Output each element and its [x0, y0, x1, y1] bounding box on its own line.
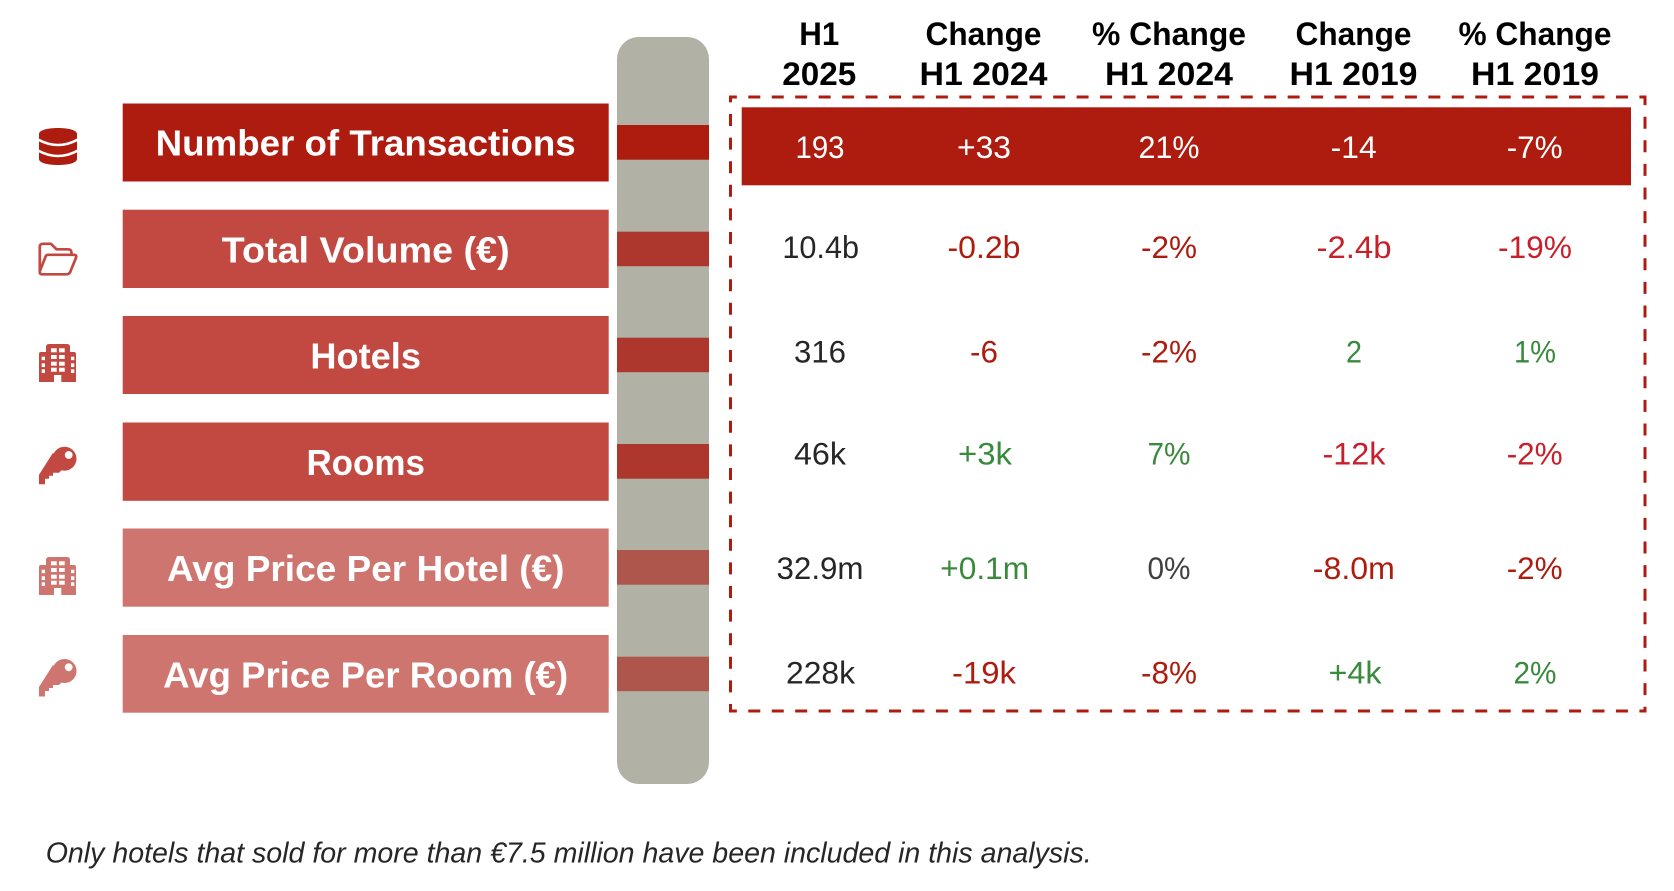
label: Avg Price Per Hotel: Avg Price Per Hotel (€): [167, 548, 564, 589]
icon: key light: [39, 659, 76, 696]
column headings: 2025: [782, 56, 856, 92]
icon: database: [38, 128, 78, 165]
row: Total Volume: 10.4b: [782, 229, 859, 265]
row: Rooms: -12k: [1322, 436, 1386, 472]
row: Avg Price Per Room: -8%: [1141, 655, 1197, 691]
column headings: H1 2019: [1290, 56, 1418, 92]
dashed table frame: [729, 96, 1646, 712]
column headings: H1: [799, 16, 839, 52]
row: Avg Price Per Room: +4k: [1328, 655, 1382, 691]
column headings: H1 2024: [920, 56, 1048, 92]
row: Avg Price Per Room: -19k: [952, 655, 1016, 691]
label: Avg Price Per Room: Avg Price Per Room (€): [163, 655, 568, 696]
label: Avg Price Per Room: [123, 635, 609, 713]
icon: key: [39, 447, 76, 484]
row: Avg Price Per Room: 2%: [1514, 655, 1556, 691]
label: Number of Transactions: [123, 104, 609, 182]
column headings: % Change: [1458, 16, 1612, 52]
row: Hotels: 316: [794, 333, 846, 369]
row: Total Volume: -0.2b: [948, 229, 1020, 265]
icon: open folder: [40, 244, 76, 274]
row: Avg Price Per Room: [786, 655, 1556, 691]
highlighted row: Number of Transactions: +33: [957, 129, 1011, 165]
column headings: % Change: [1092, 16, 1246, 52]
row: Rooms: 46k: [794, 436, 846, 472]
row: Hotels: -2%: [1141, 333, 1197, 369]
row: Rooms: -2%: [1507, 436, 1563, 472]
label: Rooms: [123, 422, 609, 501]
icon: hotel building: [39, 344, 76, 382]
label: Total Volume: [123, 210, 609, 288]
row: Hotels: 1%: [1514, 333, 1556, 369]
label: Avg Price Per Hotel: [123, 528, 609, 607]
highlighted row: Number of Transactions: [742, 107, 1631, 185]
label: Hotels: Hotels: [310, 335, 421, 376]
row: Avg Price Per Hotel: -8.0m: [1313, 550, 1395, 586]
row: Avg Price Per Hotel: +0.1m: [940, 550, 1029, 586]
panel: connector column: [617, 37, 709, 784]
row: Rooms: [794, 436, 1563, 472]
row: Avg Price Per Room: 228k: [786, 655, 855, 691]
column headings: H1 2019: [1471, 56, 1599, 92]
row: Hotels: [794, 333, 1556, 369]
label: Rooms: Rooms: [306, 442, 425, 483]
row: Total Volume: [782, 229, 1572, 265]
footnote: Only hotels that sold for more than €7.5 million have been included in this analysis.: [46, 838, 1092, 870]
row: Rooms: +3k: [958, 436, 1012, 472]
column headings: [782, 16, 1612, 92]
highlighted row: Number of Transactions: 21%: [1138, 129, 1200, 165]
label: Number of Transactions: Number of Transactions: [156, 123, 576, 164]
row: Avg Price Per Hotel: -2%: [1507, 550, 1563, 586]
highlighted row: Number of Transactions: -7%: [1507, 129, 1563, 165]
row: Avg Price Per Hotel: [776, 550, 1563, 586]
row: Total Volume: -2.4b: [1316, 229, 1392, 265]
label: Total Volume: Total Volume (€): [222, 229, 510, 270]
row: Avg Price Per Hotel: 0%: [1148, 550, 1190, 586]
row: Avg Price Per Hotel: 32.9m: [776, 550, 864, 586]
label: Hotels: [123, 316, 609, 394]
highlighted row: Number of Transactions: -14: [1331, 129, 1377, 165]
highlighted row: Number of Transactions: 193: [796, 129, 844, 165]
row: Total Volume: -19%: [1498, 229, 1572, 265]
icon: hotel building light: [39, 557, 76, 595]
row: Rooms: 7%: [1148, 436, 1190, 472]
column headings: Change: [1296, 16, 1412, 52]
row: Hotels: 2: [1346, 333, 1362, 369]
column headings: Change: [926, 16, 1042, 52]
row: Hotels: -6: [970, 333, 998, 369]
row: Total Volume: -2%: [1141, 229, 1197, 265]
column headings: H1 2024: [1105, 56, 1233, 92]
